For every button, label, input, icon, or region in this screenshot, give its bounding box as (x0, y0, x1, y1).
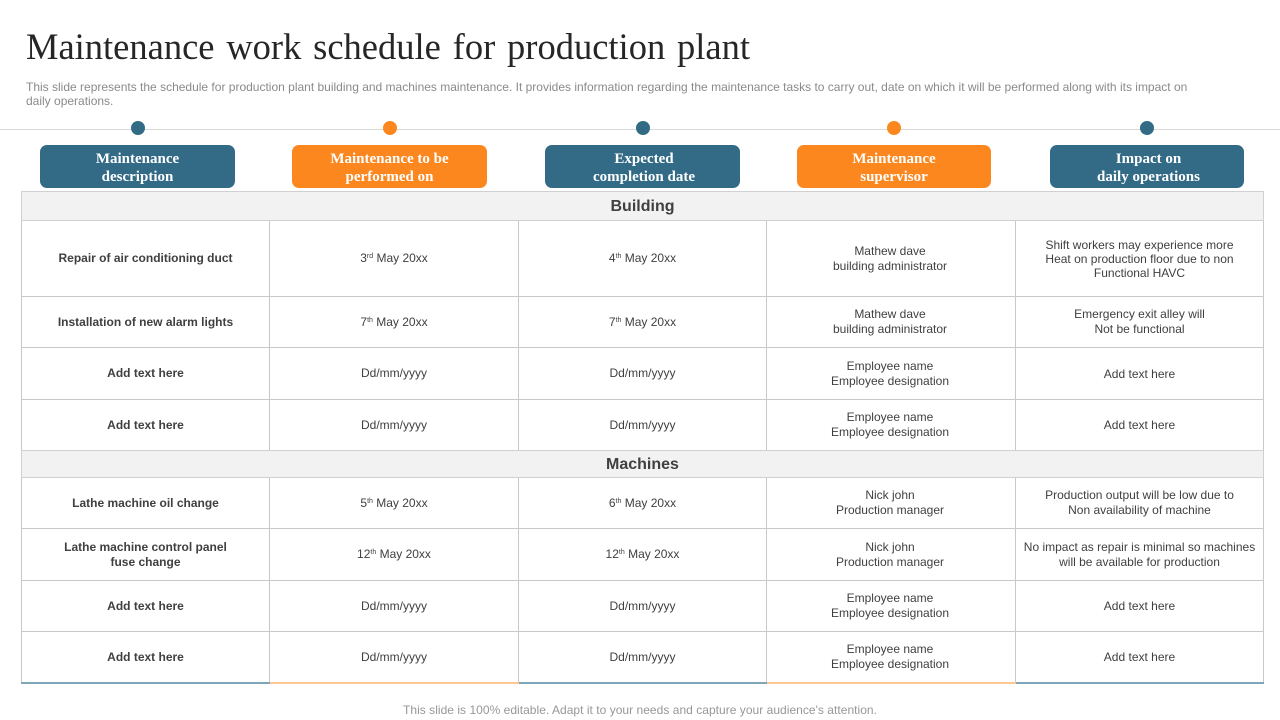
column header: maintenance to be performed on: performed on (346, 168, 433, 184)
schedule table: Employee designation (831, 425, 949, 439)
schedule table: Dd/mm/yyyy (361, 366, 427, 380)
schedule table: Employee name (847, 358, 933, 372)
title: Maintenance work schedule for production plant (26, 26, 750, 67)
subtitle text (26, 80, 1187, 108)
schedule table: 3rd May 20xx (360, 251, 428, 265)
schedule table: Employee designation (831, 657, 949, 671)
schedule table: Add text here (107, 366, 184, 380)
schedule table: 5th May 20xx (360, 496, 428, 510)
schedule table: Add text here (107, 418, 184, 432)
schedule table: Non availability of machine (1068, 503, 1211, 517)
schedule table: 7th May 20xx (360, 314, 428, 328)
schedule table: Heat on production floor due to non (1045, 252, 1234, 266)
column header: maintenance to be performed on: Maintenance to be (330, 150, 449, 166)
section heading: building (21, 191, 1264, 221)
schedule table: Employee designation (831, 606, 949, 620)
section heading: building: Building (610, 198, 674, 215)
schedule table: Dd/mm/yyyy (361, 418, 427, 432)
schedule table: building administrator (833, 258, 947, 272)
schedule table: Lathe machine oil change (72, 496, 219, 510)
column header: maintenance to be performed on (292, 145, 487, 188)
column header: maintenance description: Maintenance (96, 150, 179, 166)
column header: expected completion date (545, 145, 740, 188)
schedule table: Mathew dave (854, 244, 926, 258)
timeline marker 3 (636, 121, 650, 135)
column header: impact on daily operations: daily operations (1097, 168, 1200, 184)
schedule table: Dd/mm/yyyy (610, 650, 676, 664)
schedule table: Add text here (107, 650, 184, 664)
schedule table: Add text here (1104, 650, 1175, 664)
schedule table: Production output will be low due to (1045, 488, 1234, 502)
schedule table: Employee name (847, 642, 933, 656)
column header: maintenance supervisor: supervisor (860, 168, 928, 184)
schedule table: Installation of new alarm lights (58, 314, 233, 328)
schedule table: Add text here (1104, 599, 1175, 613)
schedule table: 7th May 20xx (609, 314, 676, 328)
column header: expected completion date: completion date (593, 168, 695, 184)
column header: impact on daily operations (1050, 145, 1244, 188)
schedule table: Employee name (847, 591, 933, 605)
column header: maintenance description: description (102, 168, 173, 184)
schedule table: Add text here (1104, 366, 1175, 380)
schedule table: Add text here (1104, 418, 1175, 432)
schedule table: fuse change (110, 554, 180, 568)
schedule table: 12th May 20xx (606, 547, 679, 561)
schedule table: 12th May 20xx (357, 547, 431, 561)
timeline marker 2 (382, 121, 396, 135)
schedule table: Nick john (865, 488, 915, 502)
section heading: machines (21, 450, 1264, 478)
schedule table: Emergency exit alley will (1074, 307, 1205, 321)
timeline marker 5 (1140, 121, 1154, 135)
schedule table: Dd/mm/yyyy (610, 598, 676, 612)
column header: maintenance description (40, 145, 235, 188)
schedule table: Dd/mm/yyyy (361, 598, 427, 612)
schedule table: Employee name (847, 410, 933, 424)
column header: expected completion date: Expected (614, 150, 674, 166)
schedule table: Production manager (836, 503, 944, 517)
column header: maintenance supervisor (797, 145, 991, 188)
schedule table: No impact as repair is minimal so machines (1024, 540, 1255, 554)
section heading: machines: Machines (606, 456, 679, 473)
schedule table: Nick john (865, 540, 915, 554)
schedule table: building administrator (833, 322, 947, 336)
timeline marker 1 (130, 121, 144, 135)
timeline marker 4 (887, 121, 901, 135)
schedule table: Dd/mm/yyyy (610, 418, 676, 432)
schedule table: 4th May 20xx (609, 251, 676, 265)
schedule table: Functional HAVC (1094, 266, 1185, 280)
schedule table: Add text here (107, 598, 184, 612)
schedule table: Repair of air conditioning duct (58, 251, 232, 265)
schedule table: Not be functional (1094, 322, 1185, 336)
column header: impact on daily operations: Impact on (1116, 150, 1181, 166)
schedule table: Production manager (836, 554, 944, 568)
column header: maintenance supervisor: Maintenance (852, 150, 936, 166)
subtitle text: This slide represents the schedule for production plant building and machines maintenance. It provides information regarding the maintenance tasks to carry out, date on which it will be performed along with its impact on (26, 80, 1187, 94)
subtitle text: daily operations. (26, 94, 113, 108)
schedule table: Dd/mm/yyyy (361, 650, 427, 664)
footer note: This slide is 100% editable. Adapt it to your needs and capture your audience's attention. (403, 703, 877, 717)
schedule table: will be available for production (1059, 554, 1220, 568)
schedule table: Dd/mm/yyyy (610, 366, 676, 380)
schedule table: Lathe machine control panel (64, 540, 227, 554)
schedule table: Shift workers may experience more (1045, 238, 1234, 252)
schedule table: 6th May 20xx (609, 496, 676, 510)
schedule table: Employee designation (831, 374, 949, 388)
schedule table: Mathew dave (854, 307, 926, 321)
